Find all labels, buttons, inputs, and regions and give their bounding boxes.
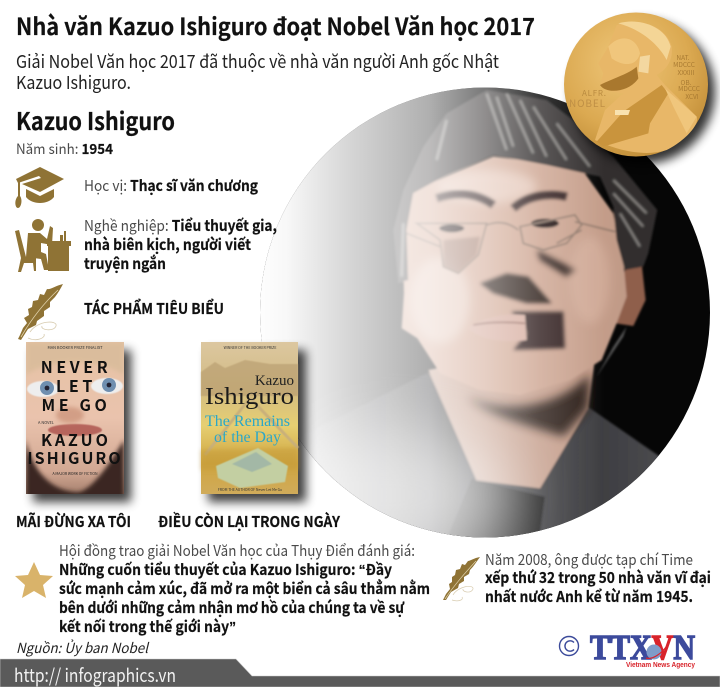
nose and mouth shadows <box>480 273 552 303</box>
logo: TTXVN: TTXVN <box>590 628 695 667</box>
icon: Nobel medal: NAT. <box>676 52 690 62</box>
source: Nguồn: Ủy ban Nobel <box>16 638 150 658</box>
book cover: Never Let Me Go: A NOVEL <box>38 420 55 426</box>
icon: Nobel medal: NOBEL <box>569 95 606 110</box>
intro text: Kazuo Ishiguro. <box>16 69 131 95</box>
Time magazine note: Năm 2008, ông được tạp chí Time <box>485 549 693 570</box>
icon: Nobel medal: XXXIII <box>678 67 695 77</box>
icon: copyright <box>560 636 578 656</box>
footer bar <box>0 659 720 687</box>
icon: Nobel medal: MDCCC <box>673 59 695 69</box>
forehead light <box>437 170 537 203</box>
quote: Nobel committee: Hội đồng trao giải Nobel Văn học của Thụy Điển đánh giá: <box>59 540 415 561</box>
occupation text <box>84 215 277 274</box>
ear <box>615 263 646 326</box>
cheek light <box>570 237 610 323</box>
book cover: The Remains of the Day <box>201 342 306 502</box>
icon: Nobel medal: XCVI <box>685 91 699 101</box>
birth year: Năm sinh: 1954 <box>16 139 113 159</box>
book title: Mãi đừng xa tôi: MÃI ĐỪNG XA TÔI <box>16 511 131 532</box>
icon: Nobel medal: ALFR. <box>582 88 606 99</box>
quote: Nobel committee: kết nối trong thế giới này” <box>59 616 236 637</box>
occupation text: Nghề nghiệp: Tiểu thuyết gia, <box>84 215 277 236</box>
book cover: The Remains of the Day: WINNER OF THE BOOKER PRIZE <box>224 346 276 351</box>
book title: Điều còn lại trong ngày: ĐIỀU CÒN LẠI TRONG NGÀY <box>158 511 340 532</box>
heading: notable works: TÁC PHẨM TIÊU BIỂU <box>84 298 224 319</box>
book cover: Never Let Me Go: NEVER <box>41 354 111 378</box>
logo: TTXVN: Vietnam News Agency <box>626 660 695 669</box>
icon: Nobel medal: MDCCC <box>678 83 700 93</box>
glasses <box>407 215 615 273</box>
book cover: The Remains of the Day: FROM THE AUTHOR OF Never Let Me Go <box>218 488 282 493</box>
book cover: The Remains of the Day: of the Day <box>214 429 281 446</box>
icon: star <box>15 562 53 598</box>
icon: feather quill <box>18 284 63 340</box>
shirt <box>451 480 546 538</box>
quote: Nobel committee: sức mạnh cảm xúc, đã mở ra một biển cả sâu thẳm nằm <box>59 578 430 599</box>
book cover: The Remains of the Day: Kazuo <box>255 373 294 389</box>
icon: graduation cap <box>15 167 64 208</box>
quote: Nobel committee: bên dưới những cảm nhận mơ hồ của chúng ta về sự <box>59 597 405 618</box>
book cover: Never Let Me Go: LET <box>56 373 96 397</box>
hair <box>393 90 657 283</box>
book cover: Never Let Me Go: ISHIGURO <box>27 445 123 469</box>
intro text <box>16 48 499 95</box>
intro text: Giải Nobel Văn học 2017 đã thuộc về nhà văn người Anh gốc Nhật <box>16 48 499 74</box>
neck <box>428 364 596 490</box>
title: Nhà văn Kazuo Ishiguro đoạt Nobel Văn học 2017 <box>16 8 535 42</box>
occupation text: nhà biên kịch, người viết <box>84 234 252 255</box>
lower fade <box>307 414 544 538</box>
book cover: The Remains of the Day: Ishiguro <box>205 384 294 410</box>
icon: writer at desk <box>15 219 71 272</box>
quote: Nobel committee: Những cuốn tiểu thuyết của Kazuo Ishiguro: “Đầy <box>59 559 392 580</box>
Time magazine note: nhất nước Anh kể từ năm 1945. <box>485 586 693 607</box>
book cover: Never Let Me Go: KAZUO <box>41 427 111 451</box>
book cover: Never Let Me Go: ME GO <box>42 392 110 416</box>
book cover: Never Let Me Go: MAN BOOKER PRIZE FINALIST <box>47 345 103 351</box>
quote: Nobel committee <box>59 540 430 637</box>
icon: small feather <box>443 557 480 601</box>
book cover: Never Let Me Go <box>26 342 131 502</box>
icon: Nobel medal <box>564 12 715 164</box>
portrait: Kazuo Ishiguro in faded circle <box>255 85 715 560</box>
lens tint <box>443 237 480 273</box>
face <box>398 157 627 395</box>
occupation text: truyện ngắn <box>84 253 166 274</box>
jacket <box>300 373 659 534</box>
icon: Nobel medal: OB. <box>681 77 692 87</box>
degree text: Học vị: Thạc sĩ văn chương <box>84 175 258 196</box>
book cover: Never Let Me Go: A MAJOR WORK OF FICTION <box>53 472 98 477</box>
Time magazine note <box>485 549 711 607</box>
name heading: Kazuo Ishiguro <box>16 102 175 137</box>
book cover: The Remains of the Day: The Remains <box>205 413 290 430</box>
eyes <box>439 224 464 233</box>
